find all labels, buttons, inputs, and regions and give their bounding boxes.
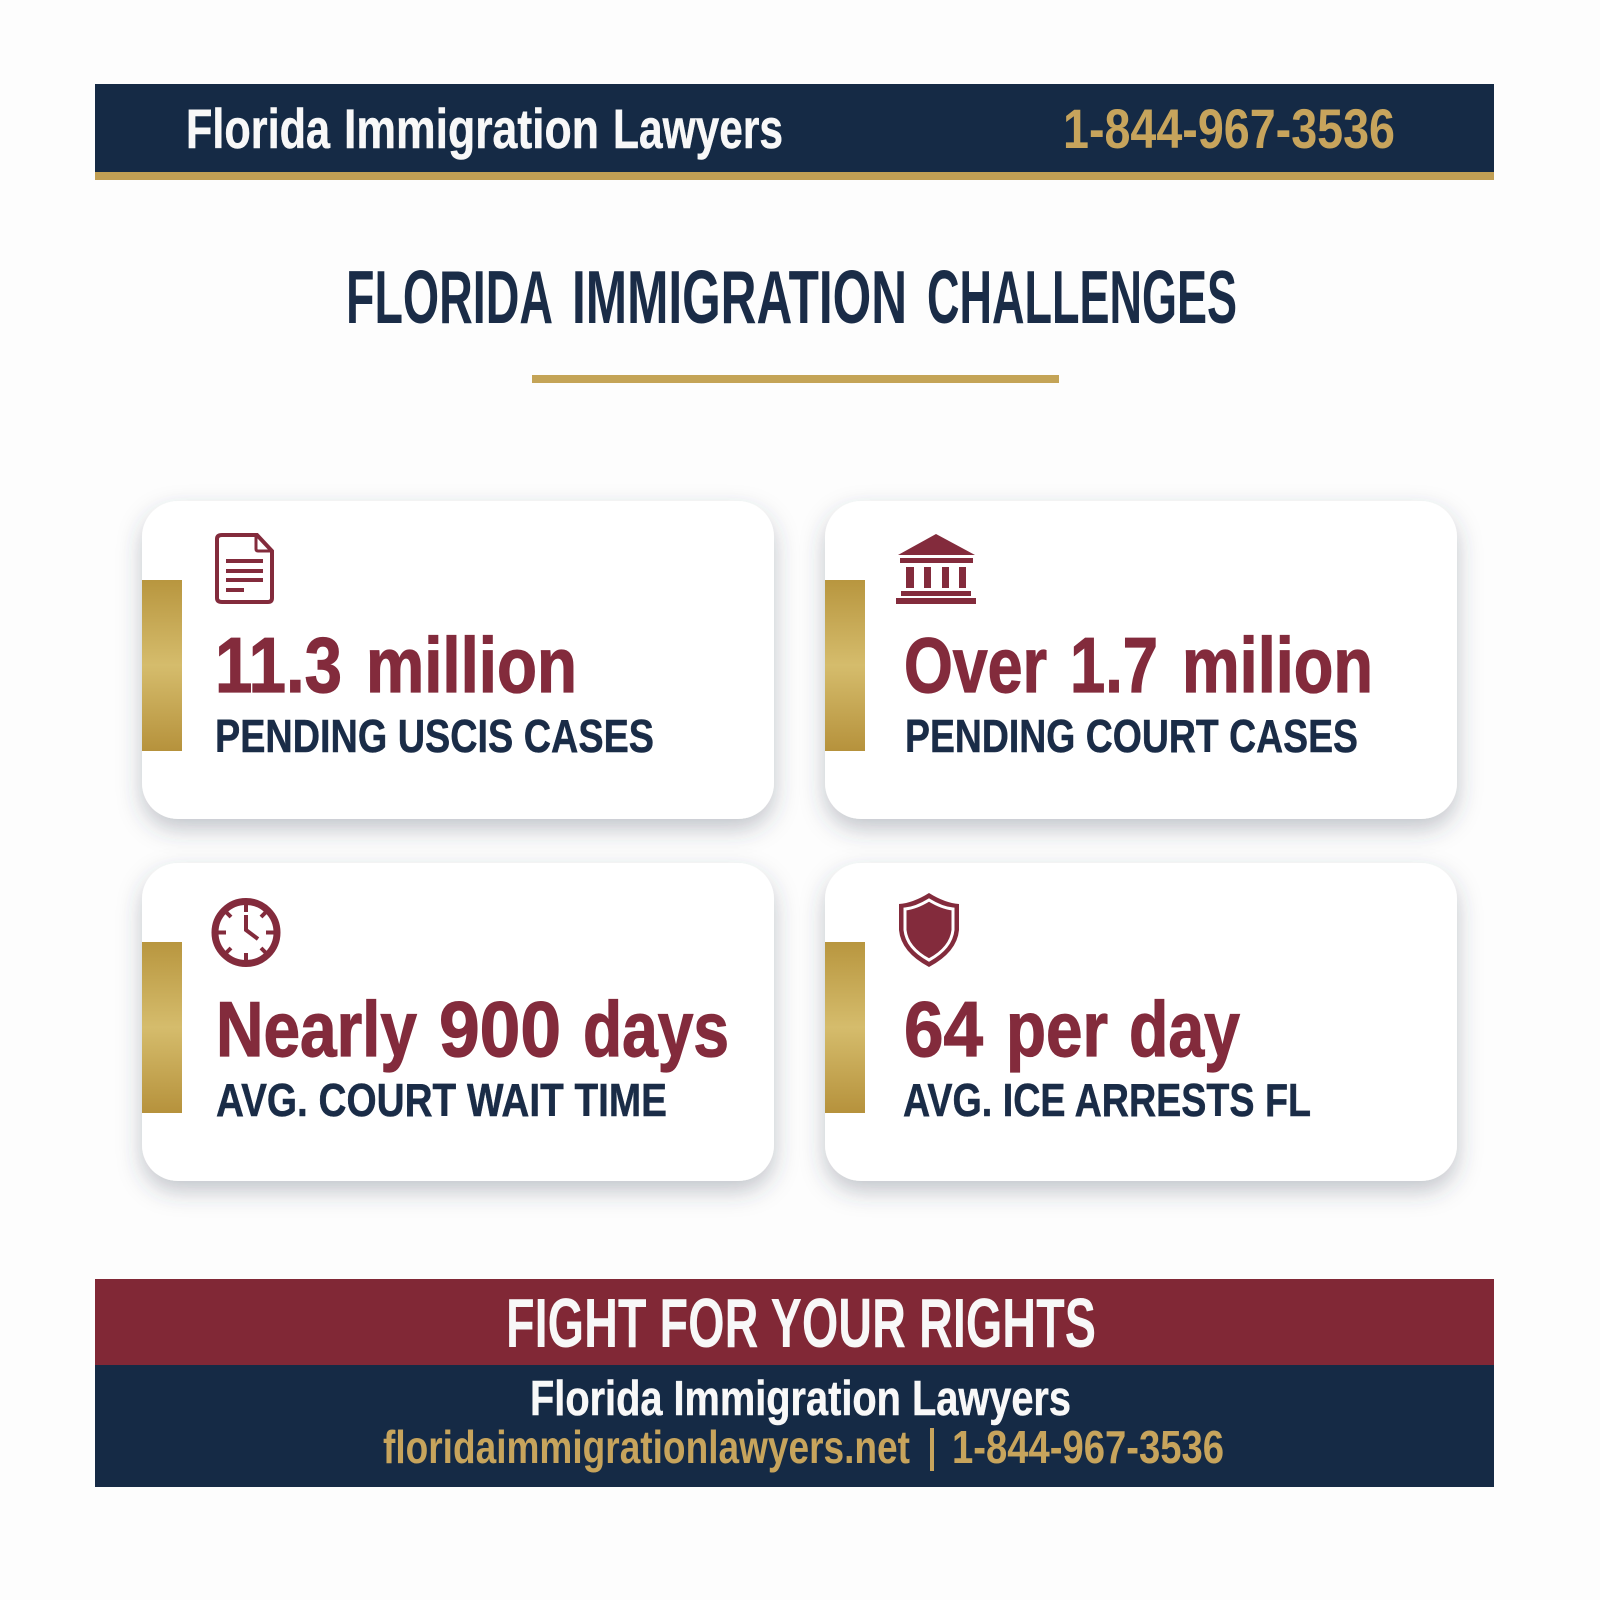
title: IMMIGRATION <box>572 255 907 339</box>
footer separator <box>930 1428 934 1471</box>
footer call-to-action banner <box>95 1279 1494 1366</box>
stat value: milion <box>1182 621 1373 709</box>
panel: average court wait time <box>142 863 774 1181</box>
stat value: per <box>1006 985 1108 1073</box>
panel: pending USCIS cases <box>142 501 774 819</box>
stat value: day <box>1129 985 1240 1073</box>
stat value: million <box>366 621 577 709</box>
call-to-action heading: FIGHT FOR YOUR RIGHTS <box>506 1284 1096 1362</box>
stat value: days <box>583 985 729 1073</box>
stat label: PENDING USCIS CASES <box>215 710 654 762</box>
title: CHALLENGES <box>927 255 1237 339</box>
panel: pending court cases <box>825 501 1457 819</box>
footer contact banner <box>95 1365 1494 1487</box>
footer website: floridaimmigrationlawyers.net <box>383 1421 910 1473</box>
header firm name: Lawyers <box>613 97 783 160</box>
stat value: 1.7 <box>1070 621 1158 709</box>
stat value: 64 <box>904 985 983 1073</box>
stat value: Over <box>904 621 1047 709</box>
stat label: PENDING COURT CASES <box>905 710 1358 762</box>
title underline <box>532 375 1059 383</box>
title: FLORIDA <box>346 255 553 339</box>
header phone number: 1-844-967-3536 <box>1063 97 1395 160</box>
panel: average ICE arrests in Florida <box>825 863 1457 1181</box>
header banner <box>95 84 1494 180</box>
stat value: 900 <box>439 985 561 1073</box>
header firm name: Florida <box>186 97 331 160</box>
stat label: AVG. ICE ARRESTS FL <box>903 1074 1311 1126</box>
icon: document <box>217 535 272 602</box>
header firm name: Immigration <box>344 97 599 160</box>
icon: clock <box>215 902 277 964</box>
stat value: 11.3 <box>215 621 342 709</box>
footer phone number: 1-844-967-3536 <box>952 1421 1224 1473</box>
icon: courthouse <box>896 534 976 604</box>
stat label: AVG. COURT WAIT TIME <box>216 1074 667 1126</box>
icon: shield <box>899 893 959 967</box>
stat value: Nearly <box>216 985 417 1073</box>
footer firm name: Florida Immigration Lawyers <box>530 1372 1071 1426</box>
